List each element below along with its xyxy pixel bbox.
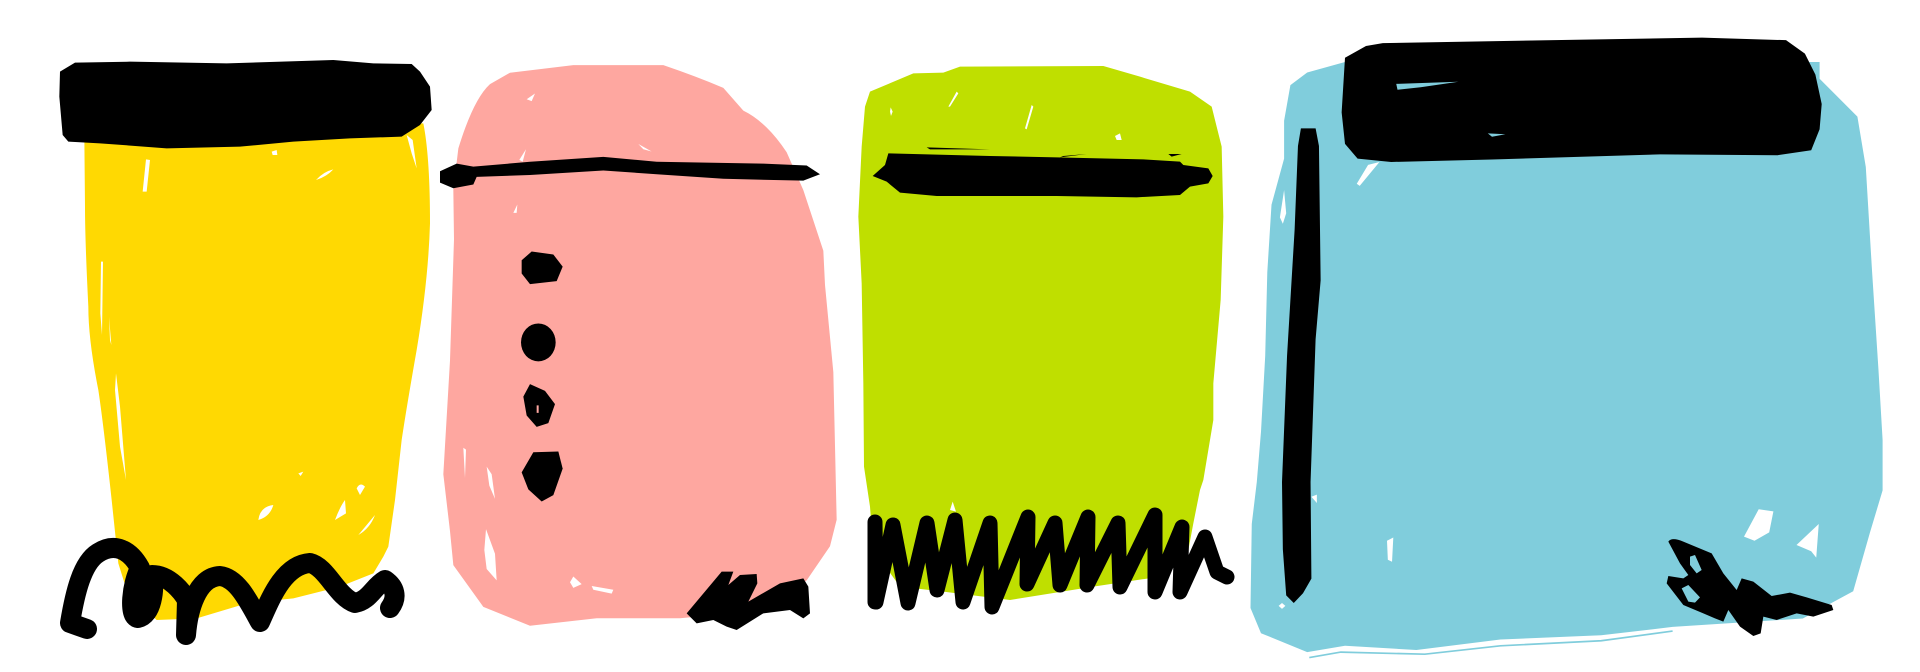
heading bar: green [873, 147, 1213, 197]
scribble: pink [687, 572, 810, 630]
panel: pink [440, 65, 837, 630]
heading line: pink [440, 157, 820, 188]
panel: yellow [59, 60, 432, 635]
zigzag scribble: green [875, 515, 1227, 607]
scribble: yellow [70, 548, 395, 635]
scribble: blue [1667, 539, 1833, 636]
panel: green [858, 66, 1227, 607]
panel: blue [1250, 38, 1883, 658]
bullet dots [521, 252, 563, 502]
header bar: yellow [59, 60, 432, 148]
header bar: blue [1342, 38, 1822, 162]
vertical line: blue [1282, 128, 1321, 603]
